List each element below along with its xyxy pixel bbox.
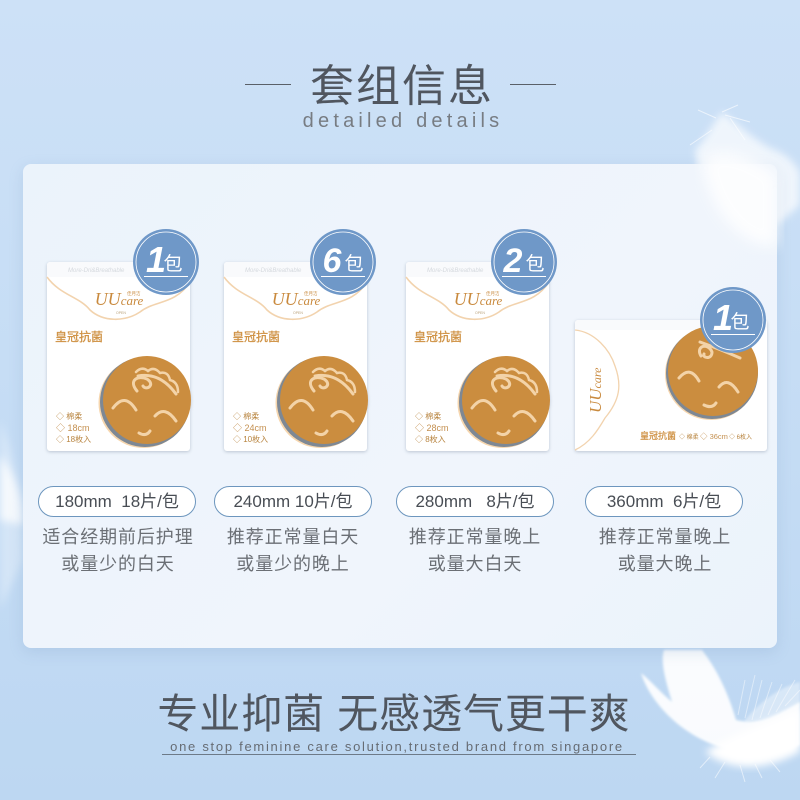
pill: 280mm: [396, 486, 554, 517]
description: 180mm: 适合经期前后护理: [42, 527, 194, 547]
feather over panel top right: [702, 154, 784, 248]
product pack 3: More-Dri&Breathable: [427, 268, 484, 274]
product pack 3: UUcare: [454, 289, 503, 309]
title rule right: [510, 84, 556, 85]
badge: 1包 (overnight): [700, 287, 766, 353]
pill: 280mm: 280mm 8片/包: [415, 492, 535, 511]
description: 360mm: [599, 527, 731, 574]
product pack 1: 佳月洁: [127, 290, 141, 297]
description: 280mm: 推荐正常量晚上: [409, 527, 541, 547]
description: 240mm: 或量少的晚上: [236, 554, 350, 574]
product pack 3: OPEN: [475, 311, 485, 315]
product pack 2: ◇ 24cm: [233, 423, 267, 433]
badge: 6包: [310, 229, 376, 295]
product pack 1: UUcare: [95, 289, 144, 309]
product pack 4: 皇冠抗菌: [640, 430, 676, 441]
product pack 2: ◇ 棉柔: [233, 411, 259, 421]
badge: 1包: 包: [163, 253, 183, 275]
product pack 2: ◇ 10枚入: [233, 434, 268, 444]
title: 套组信息: 套组信息: [310, 62, 494, 111]
panel: product set: [23, 164, 777, 648]
slogan: 专业抑菌 无感透气更干爽: [157, 691, 631, 737]
product pack 1: 皇冠抗菌: [55, 329, 103, 344]
badge: 2包: [491, 229, 557, 295]
product pack 4: [574, 320, 768, 454]
product pack 1: [46, 262, 192, 454]
badge: 1包 (overnight): 包: [730, 311, 750, 333]
pill: 180mm: 180mm 18片/包: [55, 492, 179, 511]
pill: 360mm: [585, 486, 743, 517]
product pack 1: OPEN: [116, 311, 126, 315]
product pack 3: 佳月洁: [486, 290, 500, 297]
product pack 3: ◇ 棉柔: [415, 411, 441, 421]
product pack 1: ◇ 18枚入: [56, 434, 91, 444]
badge: 1包: [133, 229, 199, 295]
pill: 240mm: [214, 486, 372, 517]
slogan subtitle: one stop feminine care solution,trusted brand from singapore: [170, 739, 624, 754]
badge: 2包: 2: [503, 242, 523, 280]
product pack 3: ◇ 8枚入: [415, 434, 446, 444]
badge: 6包: 6: [323, 242, 343, 280]
product pack 4: UUcare: [586, 367, 605, 413]
product pack 3: ◇ 28cm: [415, 423, 449, 433]
description: 280mm: 或量大白天: [428, 554, 522, 574]
product pack 3: 皇冠抗菌: [414, 329, 462, 344]
badge: 1包 (overnight): 1: [713, 297, 733, 338]
pill: 180mm: [38, 486, 196, 517]
description: 180mm: 或量少的白天: [61, 554, 175, 574]
product pack 3: [404, 262, 552, 454]
product pack 4: ◇ 36cm: [700, 432, 728, 441]
pill: 360mm: 360mm 6片/包: [607, 492, 721, 511]
product pack 2: OPEN: [293, 311, 303, 315]
product pack 2: More-Dri&Breathable: [245, 268, 302, 274]
product pack 2: [222, 262, 370, 454]
description: 240mm: [227, 527, 359, 574]
description: 360mm: 推荐正常量晚上: [599, 527, 731, 547]
pill: 240mm: 240mm 10片/包: [233, 492, 353, 511]
product pack 1: More-Dri&Breathable: [68, 268, 125, 274]
badge: 1包: 1: [146, 239, 166, 280]
description: 280mm: [409, 527, 541, 574]
product pack 1: ◇ 棉柔: [56, 411, 82, 421]
product pack 4: ◇ 棉柔: [679, 433, 699, 441]
product pack 2: 佳月洁: [304, 290, 318, 297]
subtitle: detailed details: detailed details: [303, 110, 503, 132]
product pack 1: ◇ 18cm: [56, 423, 90, 433]
badge: 2包: 包: [525, 253, 545, 275]
title rule left: [245, 84, 291, 85]
description: 240mm: 推荐正常量白天: [227, 527, 359, 547]
badge: 6包: 包: [344, 253, 364, 275]
slogan underline: [162, 754, 636, 755]
description: 360mm: 或量大晚上: [618, 554, 712, 574]
product pack 2: 皇冠抗菌: [232, 329, 280, 344]
product pack 2: UUcare: [272, 289, 321, 309]
description: 180mm: [42, 527, 194, 574]
product pack 4: ◇ 6枚入: [729, 433, 752, 441]
